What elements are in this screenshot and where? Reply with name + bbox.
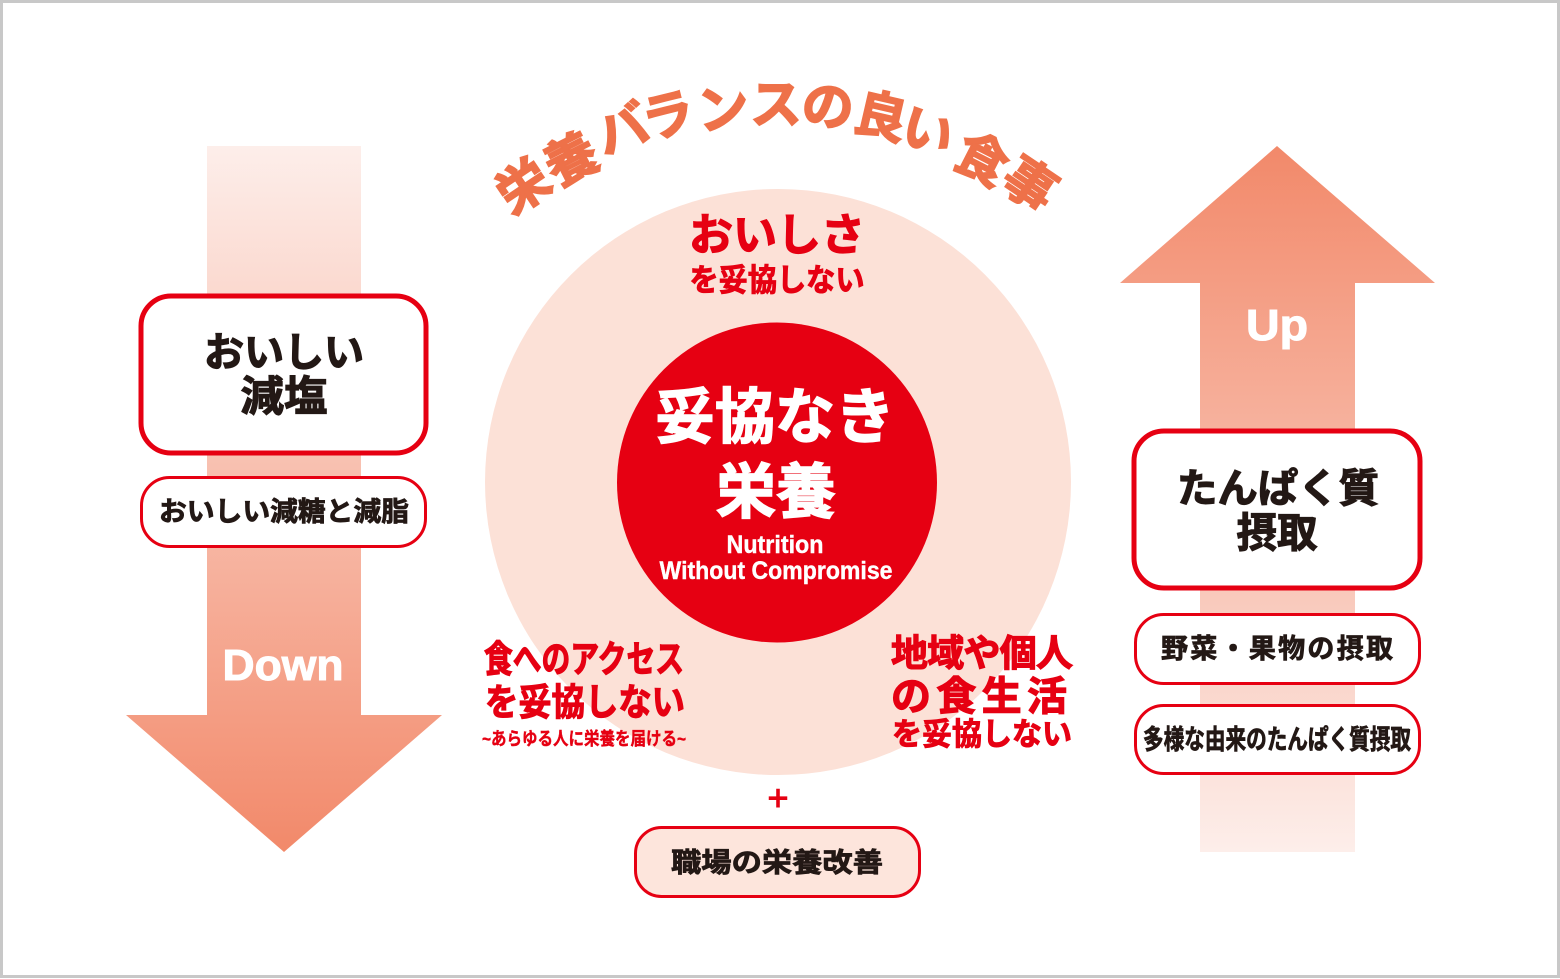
- box: sugar and fat reduction: [142, 478, 426, 546]
- outer circle: [485, 189, 1071, 775]
- label: Down: Down: [222, 641, 344, 690]
- title: curved heading: バ: [588, 95, 657, 167]
- title: curved heading: 養: [536, 123, 608, 198]
- box: tasty salt reduction: [141, 296, 426, 453]
- box: tasty salt reduction: おいしい: [204, 331, 364, 375]
- title: curved heading: [486, 76, 1067, 226]
- box: vegetables and fruit: 野菜・果物の摂取: [1161, 634, 1393, 664]
- text: taste: [689, 211, 865, 298]
- inner circle: core message: Nutrition: [726, 531, 824, 559]
- title: curved heading: 事: [991, 147, 1067, 224]
- box: workplace nutrition: 職場の栄養改善: [671, 848, 883, 878]
- title: curved heading: ス: [750, 77, 802, 135]
- box: tasty salt reduction: 減塩: [240, 373, 328, 420]
- inner circle: core message: 妥協なき: [655, 384, 895, 451]
- arrow: up: [1120, 146, 1435, 852]
- text: taste: おいしさ: [689, 211, 865, 260]
- text: taste: を妥協しない: [690, 263, 864, 298]
- plus sign: +: [767, 777, 789, 818]
- box: protein intake: たんぱく質: [1177, 467, 1379, 511]
- box: diverse protein: [1136, 706, 1420, 774]
- box: vegetables and fruit: [1136, 614, 1420, 684]
- text: regional and personal diets: を妥協しない: [892, 717, 1072, 752]
- title: curved heading: の: [799, 76, 857, 140]
- title: curved heading: ラ: [636, 83, 701, 151]
- box: protein intake: [1134, 431, 1420, 588]
- text: food access: [482, 639, 686, 749]
- title: curved heading: 良: [849, 84, 912, 152]
- box: diverse protein: 多様な由来のたんぱく質摂取: [1143, 725, 1411, 755]
- text: food access: ~あらゆる人に栄養を届ける~: [482, 728, 686, 749]
- inner circle: core message: 栄養: [716, 459, 836, 526]
- label: Up: Up: [1246, 301, 1308, 350]
- inner circle: core message: [617, 322, 937, 642]
- text: food access: 食へのアクセス: [484, 639, 684, 680]
- box: sugar and fat reduction: おいしい減糖と減脂: [159, 497, 409, 527]
- text: regional and personal diets: 地域や個人: [891, 633, 1073, 674]
- arrow: down: [126, 146, 442, 852]
- text: regional and personal diets: の食生活: [891, 675, 1067, 719]
- title: curved heading: 食: [945, 123, 1017, 198]
- title: curved heading: ン: [694, 78, 753, 142]
- box: workplace nutrition: [636, 828, 920, 896]
- title: curved heading: 栄: [486, 149, 562, 226]
- box: protein intake: 摂取: [1236, 510, 1318, 556]
- title: curved heading: い: [893, 97, 961, 169]
- text: regional and personal diets: [891, 633, 1073, 752]
- text: food access: を妥協しない: [485, 682, 685, 723]
- inner circle: core message: Without Compromise: [660, 557, 893, 585]
